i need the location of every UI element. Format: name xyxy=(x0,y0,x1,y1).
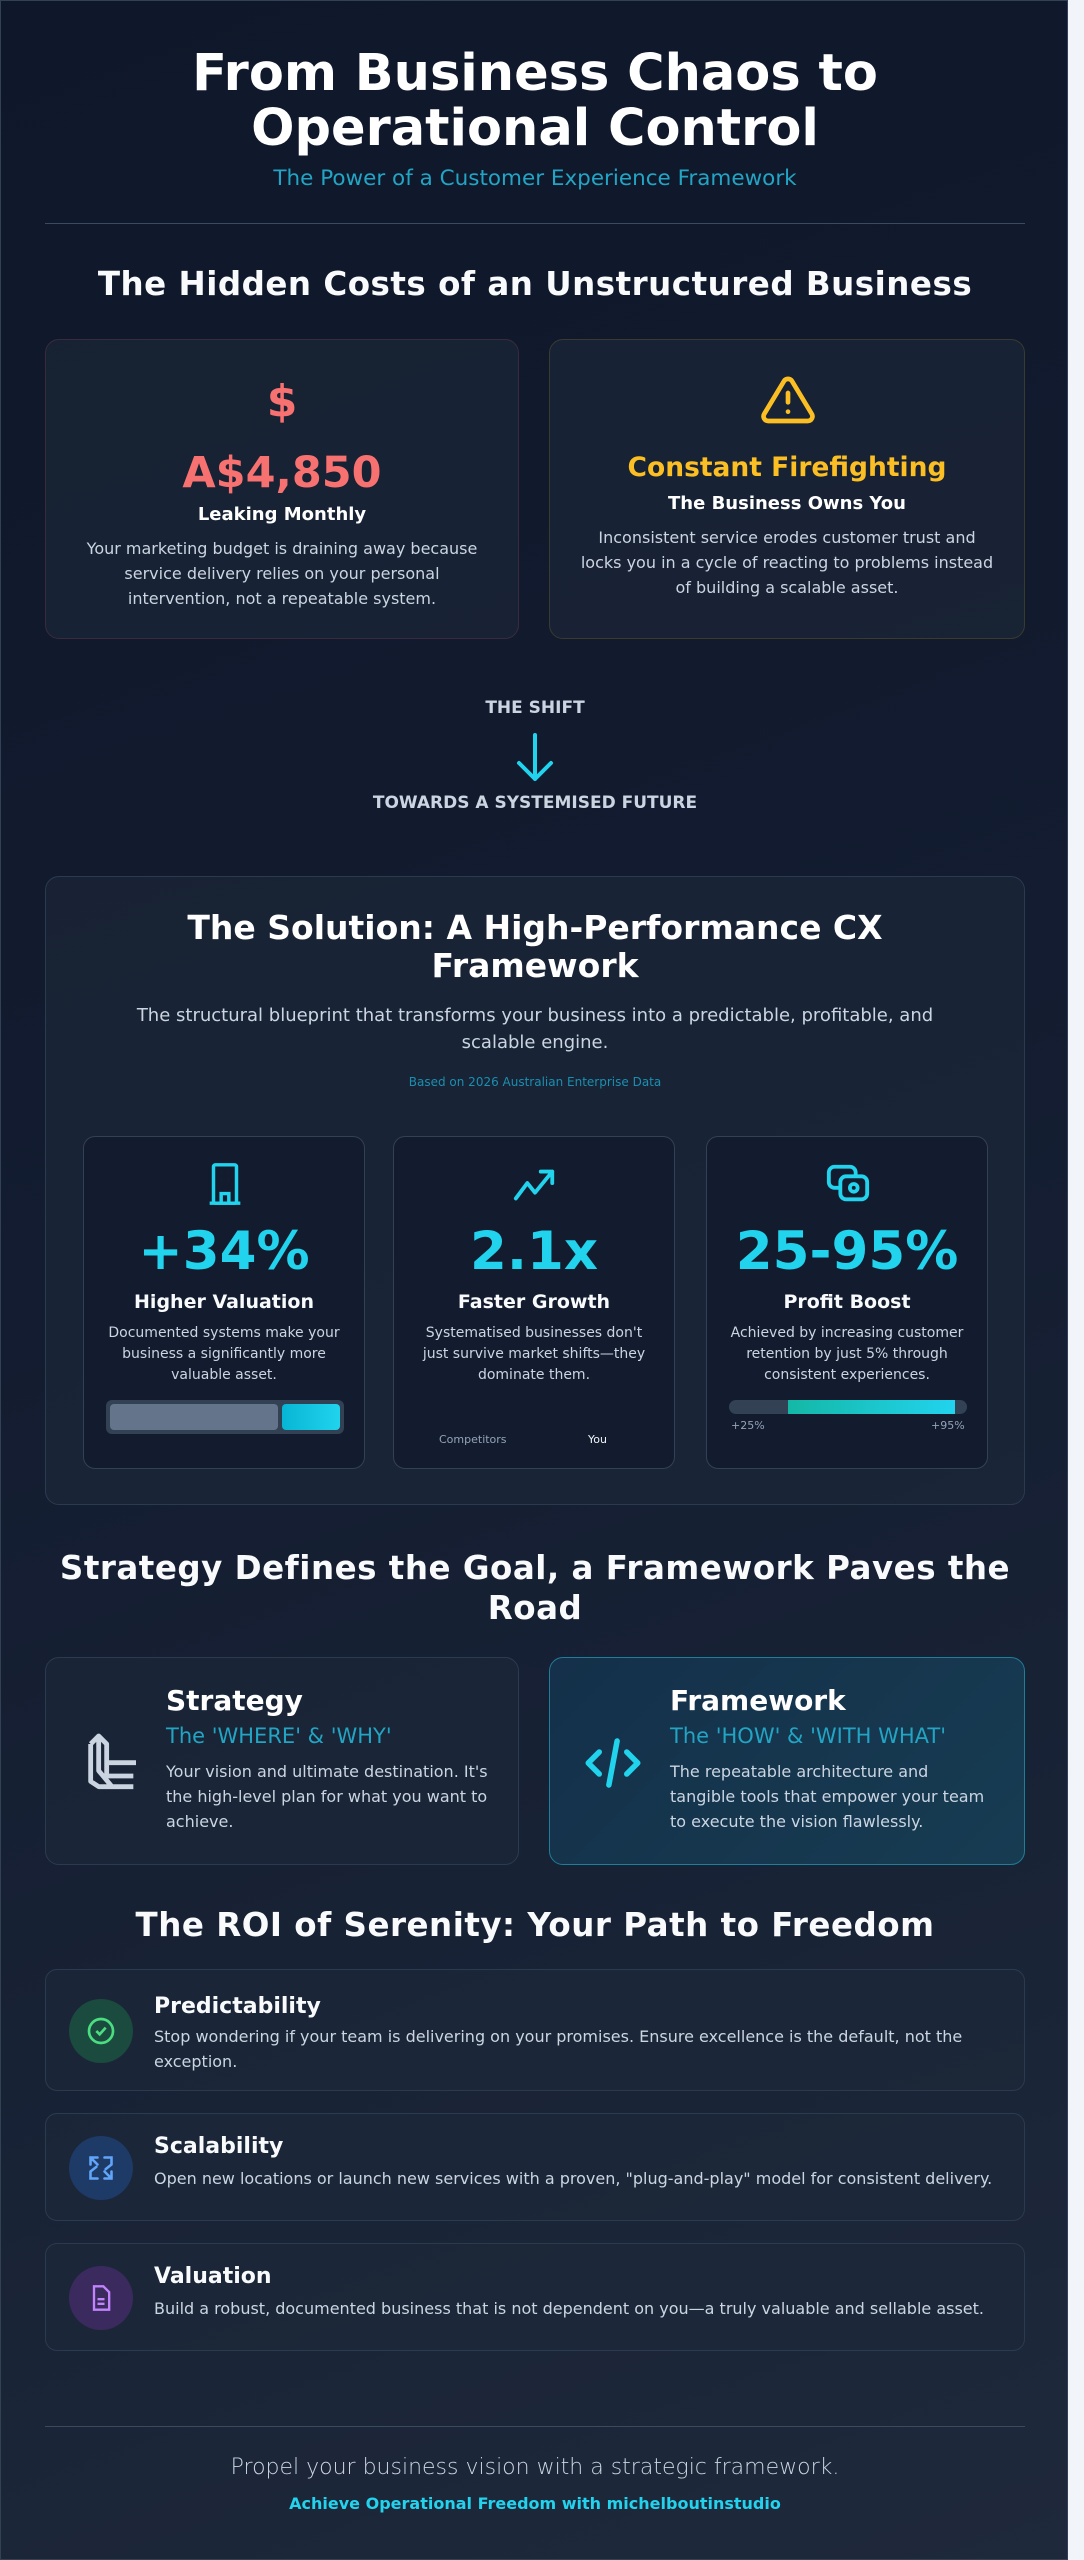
icon: money: $ xyxy=(267,376,297,427)
icon: document xyxy=(69,2266,133,2330)
stat card: valuation: +34% xyxy=(138,1221,310,1282)
stat card: valuation: Higher Valuation xyxy=(134,1291,314,1313)
icon: code xyxy=(586,1738,640,1788)
heading: strategy: Road xyxy=(488,1589,582,1627)
title: Operational Control xyxy=(251,99,819,158)
stat card: growth: You xyxy=(588,1433,607,1446)
stat card: profit: Achieved by increasing customer retention by just 5% through consistent experiences. xyxy=(731,1325,963,1383)
footer text: Propel your business vision with a strategic framework. xyxy=(231,2455,839,2480)
panel: framework: Framework xyxy=(670,1684,846,1717)
shift caption: TOWARDS A SYSTEMISED FUTURE xyxy=(373,793,697,813)
icon: compass xyxy=(88,1734,136,1790)
stat card: profit: 25-95% xyxy=(736,1221,958,1282)
stat card: valuation xyxy=(83,1136,365,1469)
subtitle: The Power of a Customer Experience Framework xyxy=(273,166,797,191)
title: From Business Chaos to xyxy=(192,44,878,103)
footer link: Achieve Operational Freedom with michelboutinstudio xyxy=(289,2494,781,2513)
panel: strategy: The 'WHERE' & 'WHY' xyxy=(166,1724,392,1748)
panel: framework: The repeatable architecture and tangible tools that empower your team to execute the vision flawlessly. xyxy=(670,1762,984,1831)
arrow xyxy=(516,733,554,782)
heading: Framework xyxy=(431,946,639,985)
row: predictability: Stop wondering if your team is delivering on your promises. Ensure excellence is the default, not the exception. xyxy=(154,2027,962,2071)
icon: check xyxy=(69,1999,133,2063)
row: predictability: Predictability xyxy=(154,1994,321,2019)
stat card: growth: Faster Growth xyxy=(458,1291,610,1313)
heading: Constant Firefighting xyxy=(628,452,946,483)
stat card: growth: Systematised businesses don't just survive market shifts—they dominate them. xyxy=(423,1325,645,1383)
heading: strategy: Strategy Defines the Goal, a Framework Paves the xyxy=(60,1549,1010,1587)
text: The structural blueprint that transforms your business into a predictable, profitable, and scalable engine. xyxy=(137,1005,933,1053)
row: predictability xyxy=(45,1969,1025,2091)
sub: The Business Owns You xyxy=(668,493,906,514)
row: scalability: Scalability xyxy=(154,2134,283,2159)
row: valuation: Build a robust, documented business that is not dependent on you—a truly valuable and sellable asset. xyxy=(154,2299,984,2318)
heading: strategy xyxy=(60,1549,1010,1627)
stat: A$4,850 xyxy=(182,448,382,498)
range bar xyxy=(729,1400,967,1414)
panel: strategy: Strategy xyxy=(166,1684,303,1717)
icon: expand xyxy=(69,2136,133,2200)
title xyxy=(192,44,878,158)
panel: framework xyxy=(549,1657,1025,1865)
panel: solution xyxy=(45,876,1025,1505)
shift label: THE SHIFT xyxy=(485,698,585,718)
label: Leaking Monthly xyxy=(198,504,366,525)
text: Your marketing budget is draining away because service delivery relies on your personal intervention, not a repeatable system. xyxy=(87,539,477,608)
source: Based on 2026 Australian Enterprise Data xyxy=(409,1075,661,1089)
row: valuation: Valuation xyxy=(154,2264,272,2289)
panel: firefighting xyxy=(549,339,1025,639)
panel: strategy xyxy=(45,1657,519,1865)
row: scalability: Open new locations or launch new services with a proven, "plug-and-play" model for consistent delivery. xyxy=(154,2169,992,2188)
legend: Competitors xyxy=(439,1433,507,1446)
stat card: profit: +25% xyxy=(731,1419,765,1432)
icon: warning xyxy=(761,376,815,424)
icon: money xyxy=(826,1164,870,1202)
heading: The Solution: A High-Performance CX xyxy=(187,908,883,947)
heading: hidden costs: The Hidden Costs of an Unstructured Business xyxy=(98,265,972,303)
row: scalability xyxy=(45,2113,1025,2221)
stat card: profit: Profit Boost xyxy=(783,1291,911,1313)
stat card: profit xyxy=(706,1136,988,1469)
icon: trend xyxy=(514,1170,554,1200)
stat card: growth xyxy=(393,1136,675,1469)
stat card: growth: 2.1x xyxy=(470,1221,598,1282)
row: valuation xyxy=(45,2243,1025,2351)
heading xyxy=(187,908,883,985)
stat card: valuation: Documented systems make your business a significantly more valuable asset. xyxy=(108,1325,340,1383)
heading: ROI: The ROI of Serenity: Your Path to Freedom xyxy=(136,1906,934,1944)
stat card: profit: +95% xyxy=(931,1419,965,1432)
panel: framework: The 'HOW' & 'WITH WHAT' xyxy=(670,1724,946,1748)
icon: building xyxy=(210,1163,240,1205)
text: Inconsistent service erodes customer trust and locks you in a cycle of reacting to problems instead of building a scalable asset. xyxy=(581,528,993,597)
bar xyxy=(106,1400,344,1434)
panel: strategy: Your vision and ultimate destination. It's the high-level plan for what you want to achieve. xyxy=(166,1762,488,1831)
panel: leaking money xyxy=(45,339,519,639)
